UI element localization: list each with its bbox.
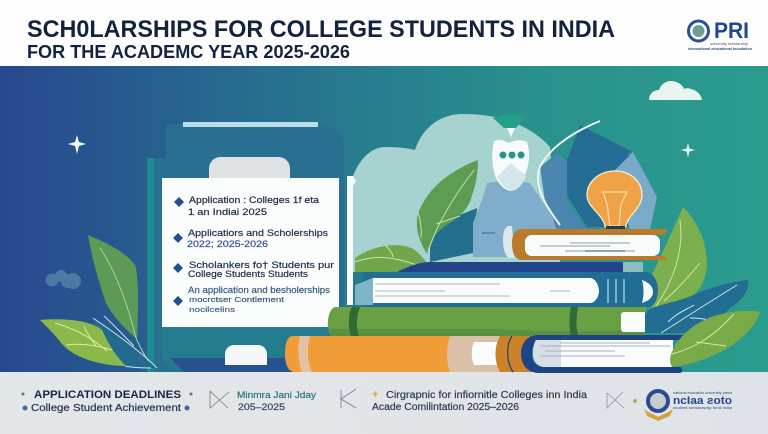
book: top brown: [503, 226, 668, 260]
illustration: cloud behind owl: [353, 114, 560, 272]
bullet 3: College Students Students: [188, 269, 308, 279]
leaf: centre green: [417, 160, 478, 254]
book: blue: [355, 272, 658, 307]
title: SCH0LARSHIPS FOR COLLEGE STUDENTS IN INDIA: [27, 16, 615, 43]
book: orange: [285, 336, 530, 372]
bullet 2: [173, 228, 328, 249]
footer block: infographic description: Cirgrapnic for infiornitle Colleges inn India: [386, 390, 588, 401]
owl body dark: [430, 208, 477, 262]
icon: sparkle right: [681, 143, 695, 158]
logo: PRI: international educational foundation: [688, 47, 752, 51]
clipboard clip: [209, 157, 290, 178]
illustration: globe with arc: [538, 121, 657, 231]
clipboard clip bar: [183, 122, 318, 127]
document panel: [162, 178, 339, 327]
illustration band: [0, 66, 768, 372]
footer block: application deadlines: APPLICATION DEADLINES: [34, 389, 181, 401]
white page edge: [347, 176, 356, 305]
footer block: dates: [237, 390, 317, 412]
leaf: blue feather: [645, 280, 748, 333]
bullet 3: Scholankers fo† Students pur: [189, 260, 334, 270]
bullet 4: mocrctser Contlement: [189, 295, 285, 304]
icon: green dot: [633, 399, 637, 403]
icon: footer cross 2: [341, 389, 356, 408]
logo: footer seal: student scholarship fund india: [673, 406, 732, 410]
illustration: clipboard: [147, 122, 345, 372]
clipboard lower panel: [162, 327, 345, 372]
owl head: [492, 140, 529, 191]
icon: footer cross 1: [210, 391, 229, 408]
icon: faint cloud left: [46, 270, 81, 289]
title: [27, 16, 615, 62]
logo: PRI: university scholarship: [710, 42, 748, 46]
illustration: owl statue: [430, 114, 558, 262]
footer block: infographic description: +: [372, 389, 378, 401]
bullet 2: 2022; 2025-2026: [187, 239, 268, 249]
book: navy bottom: [521, 335, 685, 373]
illustration: book stack: [285, 160, 760, 373]
bullet 3: [173, 260, 334, 279]
icon: light bulb: [587, 171, 642, 229]
illustration: right leaf: [651, 207, 707, 307]
bullet 1: Application : Colleges 1f eta: [189, 195, 320, 206]
icon: footer cross 3: [607, 392, 624, 408]
illustration: left leaves: [40, 235, 157, 368]
footer block: dates: 205–2025: [238, 402, 285, 412]
logo: PRI: PRI: [714, 18, 749, 43]
footer block: infographic description: [372, 389, 588, 413]
book: green: [328, 307, 647, 336]
footer block: application deadlines: [22, 389, 192, 414]
logo: footer seal: ncIaa ƨoto: [673, 395, 732, 407]
footer block: dates: Minmra Jani Jday: [237, 390, 317, 400]
footer block: application deadlines: College Student Achievement: [31, 403, 181, 414]
footer block: infographic description: Acade Comilintation 2025–2026: [372, 402, 520, 413]
icon: sparkle left: [68, 135, 86, 154]
logo: footer seal: national education university press: [673, 391, 732, 395]
bullet 4: [173, 285, 331, 314]
bullet 1: [174, 195, 320, 218]
clipboard bottom tab: [225, 345, 267, 365]
logo: footer seal: [644, 389, 732, 421]
bullet 4: An application and besholerships: [188, 285, 331, 295]
title: FOR THE ACADEMC YEAR 2025-2026: [27, 42, 350, 62]
icon: cloud top right: [649, 81, 702, 100]
book: navy flat: [397, 262, 623, 274]
owl crest: [493, 114, 525, 128]
owl body: [473, 180, 558, 257]
bullet 2: Applicatiors and Scholerships: [188, 228, 328, 238]
leaf: bottom right: [670, 311, 760, 367]
logo: PRI: [688, 18, 752, 51]
bullet 4: nocilcelins: [189, 305, 235, 314]
clipboard spine: [147, 158, 154, 372]
bullet 1: 1 an Indiai 2025: [188, 207, 267, 218]
